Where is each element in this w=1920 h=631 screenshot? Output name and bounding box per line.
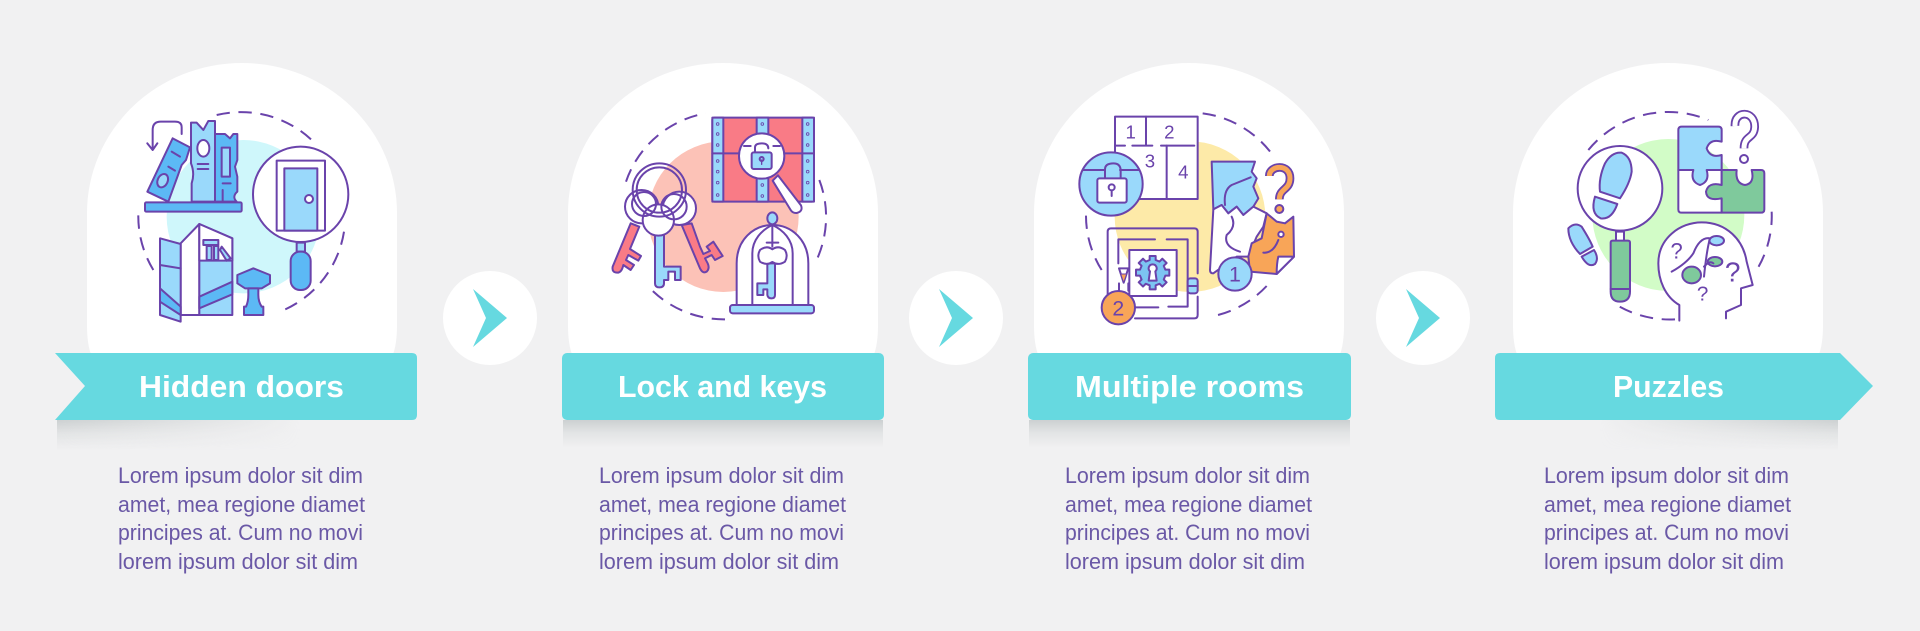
text block: puzzles: amet, mea regione diamet <box>1544 492 1791 517</box>
icon: lock and keys illustration <box>613 113 826 319</box>
text block: hidden doors: lorem ipsum dolor sit dim <box>118 549 358 574</box>
ribbon: hidden doors <box>55 353 417 450</box>
arch card <box>1513 63 1823 360</box>
icon: multiple rooms illustration: 1 <box>1125 121 1136 142</box>
text block: puzzles: principes at. Cum no movi <box>1544 520 1789 545</box>
text block: multiple rooms <box>1065 463 1312 574</box>
icon: puzzles illustration: ? <box>1725 257 1740 288</box>
panel: hidden doors <box>55 63 417 574</box>
text block: multiple rooms: amet, mea regione diamet <box>1065 492 1312 517</box>
panel: puzzles <box>1495 63 1873 574</box>
icon: hidden doors illustration <box>138 112 348 322</box>
text block: hidden doors: Lorem ipsum dolor sit dim <box>118 463 363 488</box>
text block: lock and keys <box>599 463 846 574</box>
arrow button 2 <box>909 271 1003 365</box>
panel: lock and keys <box>562 63 884 574</box>
text block: lock and keys: lorem ipsum dolor sit dim <box>599 549 839 574</box>
ribbon: hidden doors: Hidden doors <box>139 369 344 404</box>
arrow button 1 <box>443 271 537 365</box>
text block: hidden doors: amet, mea regione diamet <box>118 492 365 517</box>
text block: multiple rooms: Lorem ipsum dolor sit dim <box>1065 463 1310 488</box>
text block: lock and keys: Lorem ipsum dolor sit dim <box>599 463 844 488</box>
text block: hidden doors: principes at. Cum no movi <box>118 520 363 545</box>
text block: multiple rooms: principes at. Cum no movi <box>1065 520 1310 545</box>
icon: puzzles illustration <box>1568 112 1772 321</box>
text block: puzzles <box>1544 463 1791 574</box>
icon: puzzles illustration: ? <box>1697 283 1708 306</box>
arch card <box>1034 63 1344 360</box>
arch card <box>87 63 397 360</box>
ribbon: lock and keys: Lock and keys <box>618 369 827 404</box>
panel: multiple rooms <box>1028 63 1351 574</box>
text block: hidden doors <box>118 463 365 574</box>
text block: lock and keys: amet, mea regione diamet <box>599 492 846 517</box>
ribbon: puzzles: Puzzles <box>1613 369 1724 404</box>
icon: multiple rooms illustration: 1 <box>1229 263 1241 287</box>
icon: multiple rooms illustration: 3 <box>1145 150 1155 171</box>
ribbon: lock and keys <box>562 353 884 448</box>
text block: lock and keys: principes at. Cum no movi <box>599 520 844 545</box>
arrow button 3 <box>1376 271 1470 365</box>
ribbon: puzzles <box>1495 353 1873 450</box>
ribbon: multiple rooms <box>1028 353 1351 448</box>
icon: multiple rooms illustration: 2 <box>1164 121 1175 142</box>
icon: puzzles illustration: ? <box>1671 238 1683 263</box>
ribbon: multiple rooms: Multiple rooms <box>1075 369 1304 404</box>
icon: multiple rooms illustration <box>1079 113 1294 324</box>
text block: multiple rooms: lorem ipsum dolor sit dim <box>1065 549 1305 574</box>
icon: multiple rooms illustration: 4 <box>1178 161 1189 182</box>
icon: multiple rooms illustration: 2 <box>1112 296 1124 320</box>
text block: puzzles: Lorem ipsum dolor sit dim <box>1544 463 1789 488</box>
text block: puzzles: lorem ipsum dolor sit dim <box>1544 549 1784 574</box>
arch card <box>568 63 878 360</box>
